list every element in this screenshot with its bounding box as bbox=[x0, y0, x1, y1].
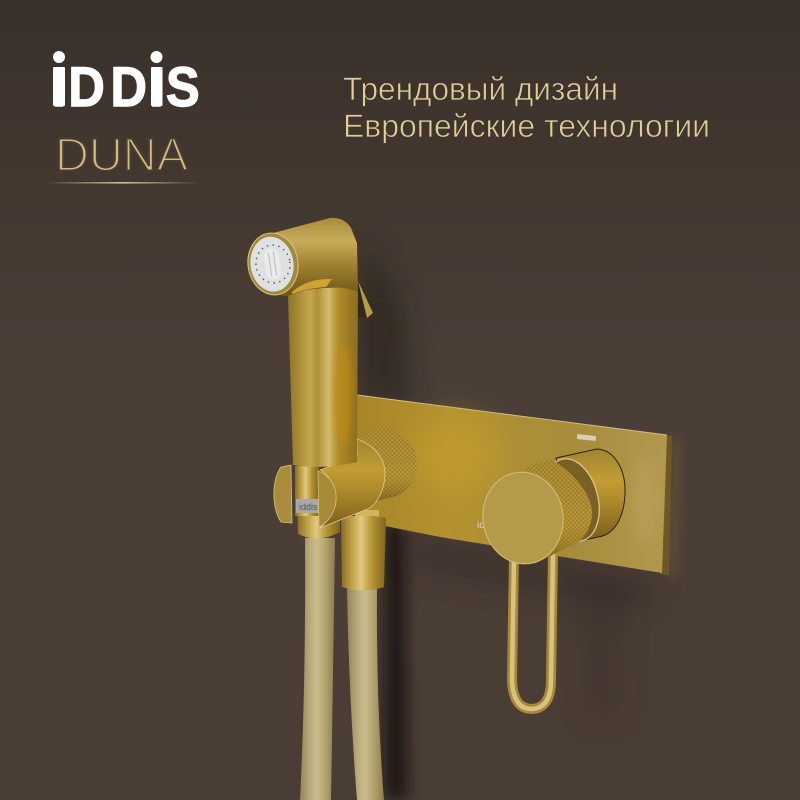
hand shower bbox=[244, 218, 373, 467]
headline text: Трендовый дизайн bbox=[343, 71, 618, 107]
logo: iDDiS: IDDIS bbox=[52, 57, 200, 119]
holder label bbox=[296, 499, 319, 513]
hose collar: left bbox=[297, 505, 340, 539]
series name: DUNA: DUNA bbox=[55, 128, 188, 180]
knob front disc bbox=[477, 467, 569, 569]
hose: right bbox=[347, 588, 384, 800]
gold rule under series name bbox=[44, 182, 200, 184]
holder knurled cylinder bbox=[357, 427, 417, 503]
plate indicator mark bbox=[577, 434, 596, 441]
mixer knob bbox=[477, 449, 625, 569]
headline text bbox=[343, 71, 710, 144]
shower handle bbox=[288, 288, 358, 467]
hose collar: right bbox=[341, 510, 386, 590]
knob rear cylinder bbox=[556, 449, 625, 540]
shower nozzle face bbox=[244, 230, 302, 298]
plate logo mark: id bbox=[477, 520, 485, 531]
holder body bbox=[320, 439, 385, 528]
shower trigger bbox=[356, 280, 373, 318]
hose: left bbox=[300, 538, 335, 800]
holder clip: right half bbox=[318, 471, 336, 527]
holder centre pipe bbox=[295, 466, 319, 516]
knob collar ring bbox=[537, 453, 607, 547]
wall plate bbox=[357, 395, 672, 575]
holder label: iddis bbox=[299, 502, 318, 512]
head-to-handle reflection bbox=[292, 279, 332, 294]
knob knurled grip bbox=[512, 459, 592, 564]
wall shadows and glow bbox=[360, 235, 680, 800]
headline text: Европейские технологии bbox=[343, 108, 710, 144]
holder clip: left half bbox=[274, 465, 292, 523]
shower head barrel bbox=[273, 218, 358, 296]
handset holder bbox=[274, 427, 417, 528]
mixer lever loop bbox=[512, 552, 553, 709]
